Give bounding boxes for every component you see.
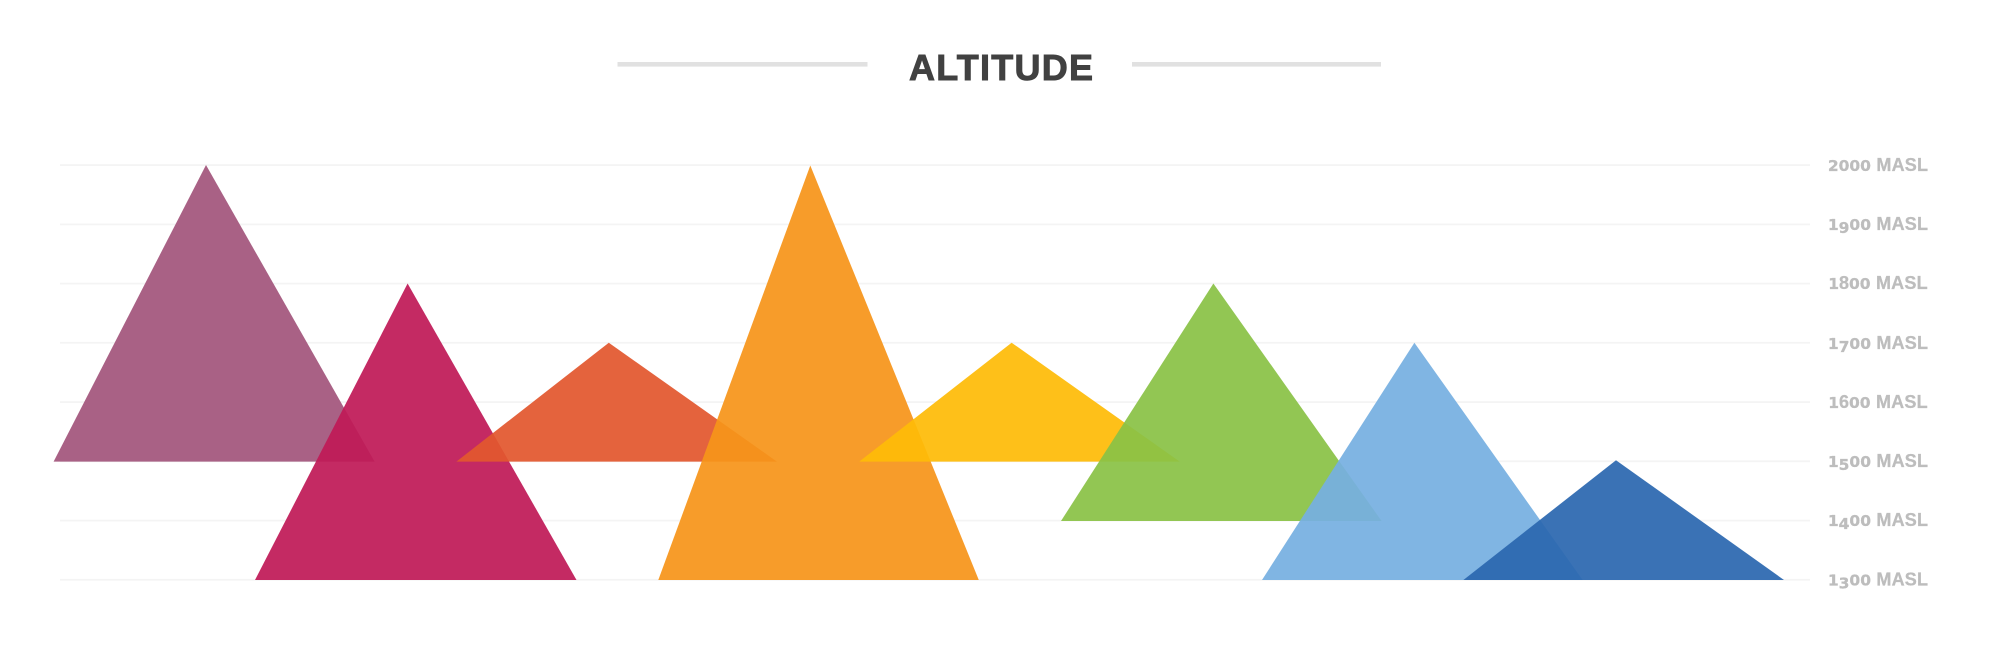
label: 1900 MASL: MASL (1876, 214, 1928, 234)
mountain: yellow, 1700 MASL (859, 343, 1180, 462)
label: 1300 MASL: 00 (1849, 572, 1876, 590)
label: 1300 MASL: 3 (1839, 574, 1849, 592)
mountain: red-orange, 1700 MASL (456, 343, 777, 462)
label: 2000 MASL: 2000 MASL (1828, 155, 1928, 175)
title: ALTITUDE (909, 47, 1093, 88)
mountains (54, 165, 1784, 580)
label: 1900 MASL: 00 (1849, 216, 1876, 234)
label: 1400 MASL: 00 (1849, 512, 1876, 530)
label: 1400 MASL: 4 (1839, 515, 1850, 533)
mountain: green, 1800 MASL (1061, 284, 1382, 521)
mountain: orange, 2000 MASL (658, 166, 979, 580)
mountain: light blue, 1700 MASL (1262, 343, 1583, 580)
mountain: crimson, 1800 MASL (255, 284, 576, 580)
mountain: dark blue, 1500 MASL (1463, 460, 1784, 580)
label: 1400 MASL: 1 (1828, 512, 1839, 530)
mountain: purple, 2000 MASL (54, 165, 375, 462)
title (618, 47, 1381, 88)
label: 1500 MASL: 00 (1849, 453, 1876, 471)
axis labels (1828, 155, 1928, 592)
label: 1500 MASL: 1 (1828, 453, 1839, 471)
label: 1700 MASL: 1 (1828, 335, 1839, 353)
label: 1700 MASL: 7 (1839, 338, 1849, 356)
label: 1300 MASL: 1 (1828, 572, 1839, 590)
label: 1700 MASL: MASL (1876, 333, 1928, 353)
label: 1900 MASL: 9 (1839, 219, 1849, 237)
label: 1800 MASL: 1800 MASL (1828, 273, 1928, 293)
label: 1700 MASL: 00 (1849, 335, 1876, 353)
label: 1500 MASL: MASL (1876, 451, 1928, 471)
label: 1600 MASL: 1600 MASL (1828, 392, 1928, 412)
label: 1300 MASL: MASL (1876, 570, 1928, 590)
label: 1400 MASL: MASL (1876, 510, 1928, 530)
label: 1900 MASL: 1 (1828, 216, 1839, 234)
label: 1500 MASL: 5 (1839, 456, 1849, 474)
